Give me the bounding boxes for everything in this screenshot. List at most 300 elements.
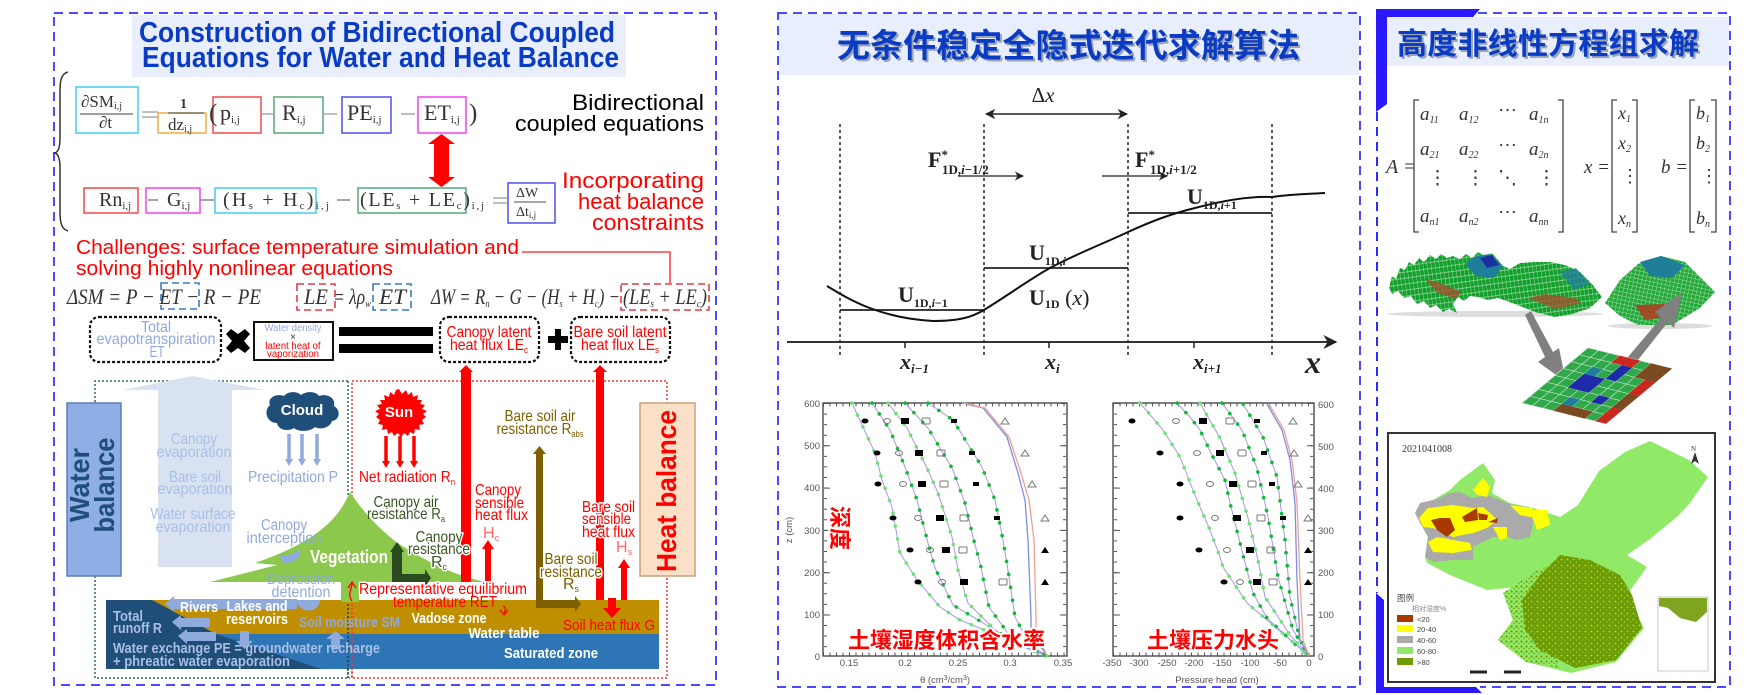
label: saturated zone: Saturated zone bbox=[504, 645, 598, 662]
equation: water balance bbox=[76, 87, 477, 135]
right axis labels: 0 bbox=[1318, 652, 1323, 663]
vector b: 2 bbox=[1705, 144, 1710, 155]
evaporation labels: Canopy bbox=[171, 431, 217, 448]
U labels: U bbox=[1187, 184, 1203, 209]
matrix A: a bbox=[1420, 206, 1430, 227]
y axis title: z (cm) bbox=[784, 517, 795, 543]
panel: water and heat balance equations bbox=[54, 13, 716, 685]
evaporation labels: evaporation bbox=[156, 519, 230, 536]
equation: water balance: ∂t bbox=[99, 113, 112, 132]
evaporation labels: Water surface bbox=[150, 506, 236, 523]
vector x: 2 bbox=[1626, 144, 1631, 155]
matrix equation bbox=[1384, 100, 1718, 232]
matrix A: A = bbox=[1384, 156, 1416, 178]
equation: heat balance: i,j bbox=[181, 200, 190, 212]
label: canopy sensible heat flux bbox=[475, 482, 528, 543]
formula row: c bbox=[595, 298, 599, 310]
x axis labels: 3 bbox=[963, 675, 967, 682]
chart: pressure head profile bbox=[1102, 400, 1334, 686]
box: water density times latent heat: vaporization bbox=[267, 349, 319, 360]
label: canopy air resistance: resistance R bbox=[367, 506, 456, 523]
formula row: − G − (H bbox=[490, 284, 560, 309]
icon: equals bbox=[339, 327, 433, 353]
flux arrow right bbox=[1102, 175, 1167, 177]
formula row: w bbox=[365, 298, 372, 310]
formula row: n bbox=[485, 298, 490, 310]
left dashed border bbox=[1376, 112, 1378, 593]
boundary lines across ground bbox=[347, 604, 349, 678]
x axis: x bbox=[900, 349, 911, 374]
formula row: c bbox=[697, 298, 701, 310]
formula row: = λρ bbox=[333, 284, 373, 309]
label: bare soil resistance: R bbox=[563, 576, 575, 593]
vector x bbox=[1583, 100, 1639, 232]
matrix A: ⋮ bbox=[1428, 168, 1447, 189]
map legend: <20 bbox=[1417, 615, 1430, 624]
equation: heat balance: + LE bbox=[402, 189, 455, 211]
icon: cloud bbox=[266, 392, 339, 431]
ground layers bbox=[106, 600, 659, 669]
equation: water balance: 1 bbox=[180, 97, 187, 112]
bare soil air resistance arrow bbox=[533, 446, 581, 612]
vector x: x = bbox=[1583, 157, 1610, 178]
x axis labels: /cm bbox=[948, 675, 963, 686]
incorporating heat balance label: heat balance bbox=[578, 189, 704, 214]
heading: bidirectional coupled equations bbox=[132, 15, 626, 77]
label: bare soil resistance: s bbox=[575, 584, 580, 594]
equation: heat balance: Rn bbox=[99, 189, 122, 211]
moisture curves bbox=[852, 403, 1047, 656]
formula row: + H bbox=[563, 284, 596, 309]
heading: bidirectional coupled equations: Equations for Water and Heat Balance bbox=[142, 42, 619, 74]
formula row: ) − bbox=[597, 284, 620, 309]
label: water table: Water table bbox=[468, 625, 540, 642]
equation: water balance: i,j bbox=[184, 124, 192, 135]
label: canopy air resistance bbox=[367, 494, 445, 524]
heading: nonlinear system bbox=[1387, 17, 1729, 66]
label: canopy resistance: resistance bbox=[408, 541, 470, 558]
formula row: (LE bbox=[623, 284, 656, 309]
matrix A: 2n bbox=[1538, 150, 1548, 161]
equation: heat balance: ) bbox=[307, 189, 313, 211]
formula row: s bbox=[650, 298, 654, 310]
label: bare soil air resistance: Bare soil air bbox=[504, 408, 576, 425]
label: canopy resistance: Canopy bbox=[416, 529, 462, 546]
label: representative equilibrium temperature bbox=[359, 581, 527, 611]
x axis labels: 0.35 bbox=[1054, 658, 1072, 669]
vector x: x bbox=[1618, 208, 1626, 228]
U labels: 1D bbox=[1045, 297, 1060, 311]
vector b: b bbox=[1696, 103, 1705, 123]
formula row: ΔW = R bbox=[431, 284, 502, 309]
box: water density times latent heat: latent heat of bbox=[266, 341, 321, 352]
equation: water balance: i,j bbox=[373, 114, 382, 126]
y axis labels bbox=[804, 399, 820, 663]
label: depression detention: Depression bbox=[267, 571, 335, 588]
label: depression detention bbox=[267, 571, 335, 601]
vector x: x bbox=[1618, 133, 1626, 153]
matrix A: a bbox=[1459, 139, 1468, 160]
matrix A: ⋮ bbox=[1466, 168, 1485, 189]
map legend: 20-40 bbox=[1417, 625, 1436, 634]
box: bare soil latent heat flux: s bbox=[655, 345, 659, 355]
box: water density times latent heat bbox=[254, 322, 333, 360]
label: net radiation: Net radiation R bbox=[359, 469, 466, 486]
right axis labels bbox=[1318, 400, 1334, 663]
bidirectional label: Bidirectional bbox=[572, 90, 704, 115]
south china sea inset bbox=[1658, 597, 1708, 671]
chart: soil moisture profile bbox=[784, 399, 1072, 686]
equation: water balance: i,j bbox=[297, 114, 306, 126]
label: soil moisture: Soil moisture SM bbox=[299, 614, 400, 631]
U labels: 1D,i−1 bbox=[914, 296, 948, 310]
equation: heat balance: i,j bbox=[472, 200, 484, 212]
arrow: coupling between equations bbox=[428, 134, 455, 187]
precipitation arrows bbox=[285, 434, 321, 466]
formula row: ET bbox=[378, 284, 408, 309]
equation: heat balance bbox=[84, 183, 555, 223]
scale bar bbox=[1470, 670, 1537, 674]
matrix A: ⋯ bbox=[1498, 101, 1517, 122]
right axis labels: 200 bbox=[1318, 568, 1334, 579]
label: lakes and reservoirs: Lakes and bbox=[226, 598, 288, 615]
label: canopy air resistance: a bbox=[441, 514, 445, 524]
box: canopy latent heat flux: c bbox=[524, 345, 528, 355]
x axis labels: 0.15 bbox=[840, 658, 858, 669]
map legend: 相对湿度% bbox=[1412, 604, 1446, 613]
box: total evapotranspiration: ET bbox=[150, 344, 165, 361]
y axis labels: 100 bbox=[804, 610, 820, 621]
y axis labels: 600 bbox=[804, 399, 820, 410]
vector b: 1 bbox=[1705, 114, 1710, 125]
equation: water balance: dz bbox=[168, 115, 184, 134]
depth label: 深度 bbox=[827, 506, 852, 550]
surface: right wave bbox=[1605, 256, 1715, 325]
label: water exchange: Water exchange PE = groundwater recharge bbox=[113, 640, 380, 657]
formula row bbox=[66, 283, 709, 310]
flux labels: * bbox=[1148, 147, 1155, 162]
flux labels: F bbox=[1135, 147, 1148, 172]
vector b: b bbox=[1696, 133, 1705, 153]
matrix A: ⋮ bbox=[1537, 168, 1556, 189]
map legend bbox=[1397, 593, 1446, 667]
box: heat balance: Heat balance bbox=[651, 410, 682, 572]
challenges text bbox=[76, 237, 519, 280]
box: bare soil latent heat flux: heat flux LE bbox=[581, 337, 666, 354]
big arrow: evapotranspiration bbox=[123, 376, 265, 567]
map frame bbox=[1388, 433, 1715, 682]
right axis labels: 400 bbox=[1318, 484, 1334, 495]
canopy latent flux arrow bbox=[459, 365, 473, 582]
pressure curves bbox=[1140, 403, 1309, 656]
evaporation labels: evaporation bbox=[158, 481, 232, 498]
icon: sun: Sun bbox=[385, 404, 413, 421]
equation: heat balance: Δt bbox=[516, 205, 529, 220]
heading: solver: 无条件稳定全隐式迭代求解算法 bbox=[837, 27, 1300, 64]
label: water exchange: + phreatic water evaporation bbox=[113, 653, 290, 670]
x axis: x bbox=[1304, 344, 1321, 380]
flux labels: * bbox=[941, 147, 948, 162]
U labels: 1D,i+1 bbox=[1203, 198, 1237, 212]
equation: heat balance: s bbox=[249, 200, 253, 212]
label: water exchange bbox=[113, 640, 380, 670]
bare soil latent flux arrow bbox=[593, 365, 607, 600]
formula row: ) bbox=[699, 284, 707, 309]
arrow: up from grid bbox=[1622, 292, 1682, 370]
label: canopy sensible heat flux: sensible bbox=[475, 495, 524, 512]
x axis labels: 0.25 bbox=[949, 658, 967, 669]
right axis labels: 300 bbox=[1318, 526, 1334, 537]
right axis labels: 100 bbox=[1318, 610, 1334, 621]
matrix A: nn bbox=[1538, 217, 1548, 228]
bottom axis labels: -350 bbox=[1102, 658, 1122, 669]
label: vadose zone: Vadose zone bbox=[412, 610, 486, 627]
bare soil sensible heat arrow bbox=[618, 559, 630, 600]
map date: 2021041008 bbox=[1402, 444, 1452, 455]
equation: heat balance: i,j bbox=[122, 200, 131, 212]
U labels: U bbox=[1029, 240, 1045, 265]
heading: nonlinear system: 高度非线性方程组求解 bbox=[1397, 28, 1699, 61]
equation: water balance: ET bbox=[424, 100, 451, 125]
U labels bbox=[898, 184, 1237, 311]
heading: solver bbox=[779, 14, 1359, 75]
box: water balance: balance bbox=[89, 438, 120, 532]
box: heat balance bbox=[640, 403, 695, 576]
map legend: 60-80 bbox=[1417, 647, 1436, 656]
icon: multiply bbox=[226, 329, 250, 353]
evaporation labels bbox=[150, 431, 236, 536]
label: bare soil air resistance: abs bbox=[571, 429, 584, 439]
evaporation labels: evaporation bbox=[156, 444, 232, 461]
flux labels: 1D,i+1/2 bbox=[1150, 162, 1197, 177]
right axis labels: 600 bbox=[1318, 400, 1334, 411]
cell boundaries bbox=[840, 124, 1272, 355]
matrix A: a bbox=[1420, 139, 1430, 160]
box: water density times latent heat: Water density bbox=[264, 323, 322, 334]
formula row: ΔSM = P − ET − R − PE bbox=[66, 284, 261, 309]
y axis labels: 200 bbox=[804, 568, 820, 579]
flux arrow left bbox=[958, 175, 1023, 177]
matrix A: ⋱ bbox=[1498, 168, 1517, 189]
moisture observation markers bbox=[862, 418, 1049, 585]
icon: cloud: Cloud bbox=[281, 402, 323, 419]
label: bare soil resistance: Bare soil bbox=[544, 551, 598, 568]
equation: heat balance: i,j bbox=[316, 200, 329, 212]
x axis: i bbox=[1056, 361, 1060, 376]
china map regions bbox=[1415, 441, 1708, 673]
matrix A: 11 bbox=[1430, 115, 1439, 126]
arrow: down to grid bbox=[1525, 311, 1566, 382]
x axis labels bbox=[840, 658, 1072, 686]
label: precipitation: Precipitation P bbox=[248, 469, 338, 486]
solution curve bbox=[827, 193, 1325, 321]
cell averages bbox=[840, 213, 1272, 310]
vector b bbox=[1661, 100, 1718, 232]
corner accent: top left bbox=[1376, 9, 1480, 112]
label: vegetation: Vegetation bbox=[310, 547, 388, 567]
bottom axis labels: Pressure head (cm) bbox=[1175, 675, 1259, 686]
soil moisture label: 土壤湿度体积含水率 bbox=[848, 628, 1045, 653]
coupled equations label: coupled equations bbox=[515, 111, 704, 136]
label: lakes and reservoirs: reservoirs bbox=[226, 611, 288, 628]
radiation arrows bbox=[382, 436, 418, 468]
x axis: i+1 bbox=[1204, 361, 1222, 376]
label: canopy sensible heat flux: heat flux bbox=[475, 507, 528, 524]
equation: water balance: p bbox=[220, 100, 231, 125]
vector b: n bbox=[1705, 219, 1710, 230]
label: bare soil sensible heat flux: heat flux bbox=[582, 524, 635, 541]
heat boundary across ground bbox=[351, 604, 353, 678]
equation: heat balance: c bbox=[300, 200, 305, 212]
bottom axis labels bbox=[1102, 658, 1312, 686]
boxes: water and heat dotted regions bbox=[95, 381, 667, 678]
vegetation tree bbox=[210, 492, 485, 600]
small curved arrows bbox=[348, 582, 508, 615]
label: bare soil air resistance: resistance R bbox=[496, 421, 585, 438]
matrix A: 21 bbox=[1430, 150, 1440, 161]
challenges text: solving highly nonlinear equations bbox=[76, 258, 393, 280]
equation: water balance: i,j bbox=[451, 114, 460, 126]
vector x: 1 bbox=[1626, 114, 1631, 125]
matrix A: 22 bbox=[1468, 150, 1478, 161]
label: bare soil air resistance bbox=[496, 408, 584, 439]
matrix A: a bbox=[1459, 104, 1468, 125]
label: depression detention: detention bbox=[272, 584, 330, 601]
x axis bbox=[787, 342, 1336, 380]
bottom axis labels: 0 bbox=[1306, 658, 1312, 669]
evaporation labels: Bare soil bbox=[169, 469, 221, 486]
matrix A: a bbox=[1529, 139, 1538, 160]
incorporating heat balance label bbox=[562, 168, 704, 235]
label: canopy resistance: c bbox=[443, 562, 448, 572]
vector x: n bbox=[1626, 219, 1631, 230]
formula row: s bbox=[559, 298, 563, 310]
equation: water balance: i,j bbox=[114, 101, 122, 112]
U labels: U bbox=[898, 282, 914, 307]
y axis labels: 400 bbox=[804, 483, 820, 494]
equation: heat balance: ) bbox=[463, 189, 470, 211]
box: water balance: Water bbox=[64, 448, 95, 522]
canopy resistance arrow bbox=[390, 542, 431, 587]
vector x: x bbox=[1618, 103, 1626, 123]
heading: bidirectional coupled equations: Construction of Bidirectional Coupled bbox=[139, 17, 615, 49]
label: representative equilibrium temperature: temperature RET bbox=[393, 594, 497, 611]
incorporating heat balance label: constraints bbox=[592, 210, 704, 235]
grid surface bbox=[1522, 348, 1672, 424]
label: bare soil resistance: resistance bbox=[540, 564, 602, 581]
equation: water balance: i,j bbox=[231, 114, 240, 126]
U labels: (x) bbox=[1065, 285, 1089, 310]
canopy sensible heat arrow bbox=[482, 540, 494, 582]
label: net radiation: n bbox=[451, 477, 455, 487]
box: total evapotranspiration bbox=[90, 317, 221, 362]
x axis labels: ) bbox=[967, 675, 970, 686]
box: canopy latent heat flux bbox=[440, 317, 539, 362]
label: bare soil sensible heat flux: sensible bbox=[582, 511, 631, 528]
x axis labels: θ (cm bbox=[920, 675, 944, 686]
box: total evapotranspiration: evapotranspiration bbox=[96, 331, 216, 348]
label: total runoff bbox=[113, 608, 162, 637]
label: canopy interception: interception bbox=[246, 530, 322, 547]
matrix A: n1 bbox=[1430, 217, 1440, 228]
label: canopy air resistance: Canopy air bbox=[374, 494, 439, 511]
U labels: U bbox=[1029, 285, 1045, 310]
x axis labels: 0.2 bbox=[898, 658, 912, 669]
vector b: b = bbox=[1661, 157, 1688, 178]
box: total evapotranspiration: Total bbox=[141, 319, 171, 336]
matrix A: a bbox=[1459, 206, 1468, 227]
x axis: i−1 bbox=[911, 361, 929, 376]
y axis labels: 0 bbox=[815, 652, 820, 663]
equation: water balance: ( bbox=[209, 100, 217, 127]
runoff arrows bbox=[165, 596, 345, 649]
label: bare soil resistance bbox=[540, 551, 602, 594]
pressure observation markers bbox=[1128, 418, 1312, 585]
label: total runoff: runoff R bbox=[113, 620, 162, 637]
equation: heat balance: c bbox=[457, 200, 462, 212]
label: representative equilibrium temperature: Representative equilibrium bbox=[359, 581, 527, 598]
incorporating heat balance label: Incorporating bbox=[562, 168, 704, 193]
north arrow bbox=[1691, 445, 1699, 464]
equation: water balance: R bbox=[282, 100, 297, 125]
map legend: 图例 bbox=[1397, 593, 1414, 603]
label: canopy sensible heat flux: H bbox=[483, 525, 495, 542]
equation: heat balance: (H bbox=[223, 189, 246, 211]
box: water balance bbox=[64, 403, 121, 576]
y axis labels: 300 bbox=[804, 526, 820, 537]
box: canopy latent heat flux: heat flux LE bbox=[450, 337, 534, 354]
equation: water balance: PE bbox=[347, 100, 373, 125]
label: soil heat flux: Soil heat flux G bbox=[563, 617, 655, 634]
surface: left wave bbox=[1389, 252, 1602, 317]
icon: sun bbox=[375, 389, 427, 437]
equation: heat balance: ΔW bbox=[516, 186, 539, 201]
pressure head label: 土壤压力水头 bbox=[1147, 628, 1279, 653]
vector b: ⋮ bbox=[1700, 166, 1718, 186]
vector b: b bbox=[1696, 208, 1705, 228]
matrix A: n2 bbox=[1468, 217, 1478, 228]
label: bare soil sensible heat flux: Bare soil bbox=[582, 499, 635, 516]
formula row: + LE bbox=[654, 284, 697, 309]
label: bare soil sensible heat flux: s bbox=[628, 547, 633, 557]
matrix A: 12 bbox=[1468, 115, 1478, 126]
flux labels bbox=[928, 147, 1197, 177]
right axis labels: 500 bbox=[1318, 442, 1334, 453]
connector from challenges bbox=[522, 252, 670, 283]
challenges text: Challenges: surface temperature simulation and bbox=[76, 237, 519, 259]
label: canopy interception: Canopy bbox=[261, 517, 307, 534]
matrix A: ⋯ bbox=[1498, 203, 1517, 224]
arrow: soil heat flux bbox=[603, 598, 621, 618]
label: canopy sensible heat flux: c bbox=[495, 533, 500, 543]
matrix A: a bbox=[1420, 104, 1430, 125]
label: rivers: Rivers bbox=[180, 599, 218, 616]
icon: plus bbox=[548, 329, 568, 350]
finite volume diagram bbox=[787, 83, 1336, 380]
label: bare soil sensible heat flux: H bbox=[616, 539, 628, 556]
label: canopy sensible heat flux: Canopy bbox=[475, 482, 521, 499]
y axis labels: 500 bbox=[804, 441, 820, 452]
equation: water balance: ) bbox=[469, 100, 477, 127]
flux labels: 1D,i−1/2 bbox=[942, 162, 989, 177]
box: water density times latent heat: × bbox=[290, 332, 296, 343]
x axis: x bbox=[1193, 349, 1204, 374]
matrix A: ⋯ bbox=[1498, 136, 1517, 157]
label: bare soil sensible heat flux bbox=[582, 499, 635, 557]
box: bare soil latent heat flux: Bare soil latent bbox=[574, 324, 667, 341]
bottom axis labels: -100 bbox=[1240, 658, 1260, 669]
vector x: ⋮ bbox=[1621, 166, 1639, 186]
